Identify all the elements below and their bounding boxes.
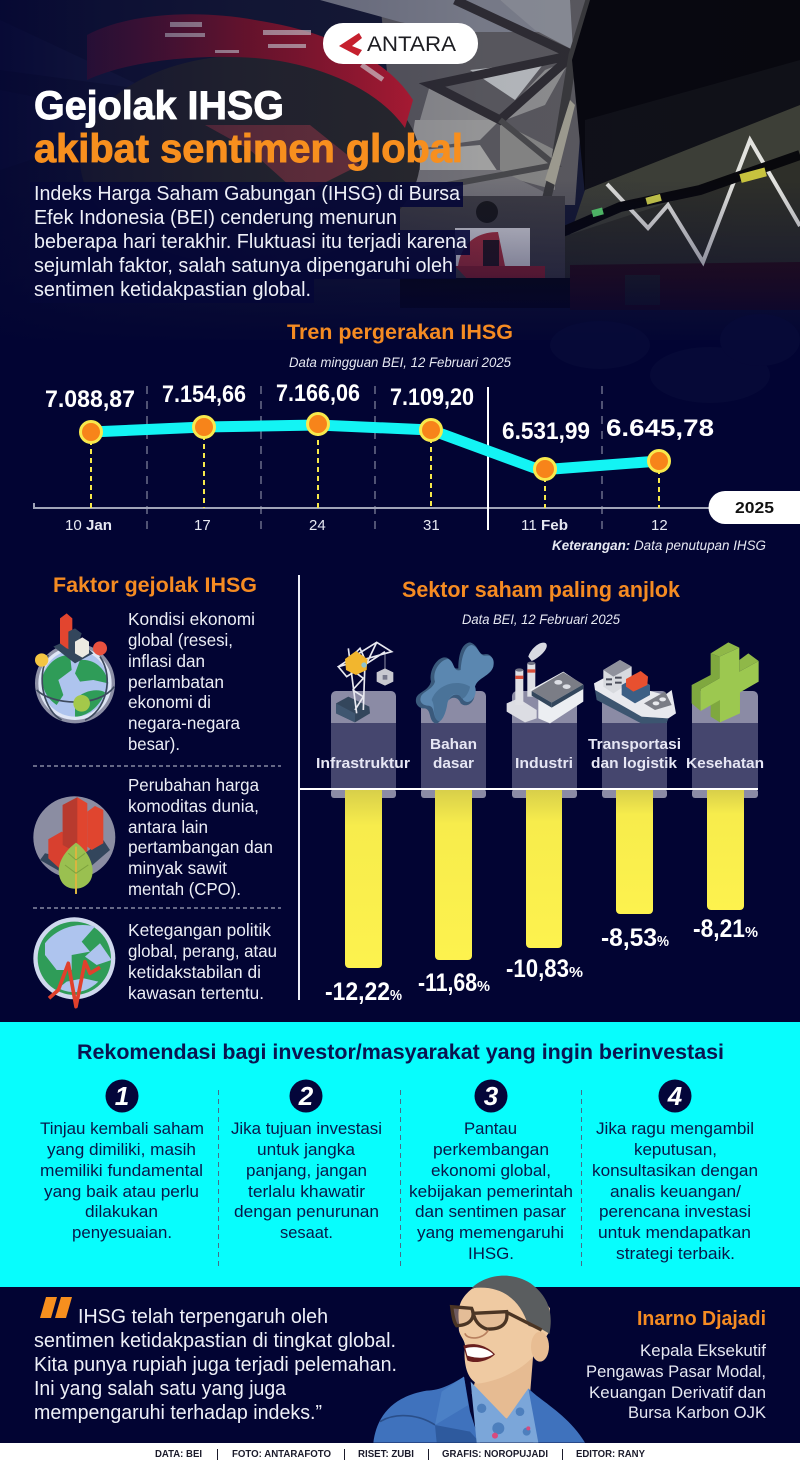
recommendation 1: penyesuaian.	[72, 1223, 172, 1242]
footer credits: EDITOR: RANY	[576, 1448, 645, 1460]
axis labels	[65, 517, 668, 534]
value labels: 7.088,87	[45, 386, 135, 413]
text: factor 1	[128, 609, 255, 754]
recommendation 3: Pantau	[464, 1119, 517, 1138]
text: factor 3: ketidakstabilan di	[128, 962, 261, 982]
recommendation 3: perkembangan	[433, 1140, 549, 1159]
recommendation 4	[592, 1119, 758, 1263]
recommendation 4: konsultasikan dengan	[592, 1161, 758, 1180]
footer credits: RISET: ZUBI	[358, 1448, 414, 1460]
sector values: -8,53	[601, 924, 657, 952]
stage	[400, 196, 565, 286]
ceiling	[380, 0, 590, 205]
sector labels: dasar	[433, 755, 474, 772]
data points	[80, 414, 670, 480]
recommendation 4: analis keuangan/	[610, 1182, 741, 1201]
panel: quote	[0, 1276, 800, 1443]
column backgrounds	[331, 691, 758, 798]
icon: factory	[507, 643, 583, 723]
icon: quotation mark	[40, 1297, 72, 1318]
sector values: -10,83	[506, 955, 569, 983]
bar chart: sector declines	[345, 790, 744, 968]
intro text block: sentimen ketidakpastian global.	[34, 279, 311, 301]
white chart zigzag	[607, 140, 800, 262]
faint seating	[550, 314, 800, 403]
icon: construction crane	[336, 642, 393, 722]
panel: volatility factors	[33, 574, 281, 1007]
axis labels: 10 Jan	[65, 517, 112, 534]
icon: commodity bars and leaf	[33, 796, 115, 894]
line chart: IHSG trend	[34, 380, 800, 553]
sector values: %	[657, 933, 669, 950]
text: factor 3: Ketegangan politik	[128, 920, 271, 940]
quote text: mempengaruhi terhadap indeks.”	[34, 1402, 322, 1424]
intro text block: beberapa hari terakhir. Fluktuasi itu terjadi karena	[34, 231, 468, 253]
axis labels: 31	[423, 517, 440, 534]
red ring display	[87, 14, 413, 128]
axis labels: 17	[194, 517, 211, 534]
heading: recommendations: Rekomendasi bagi investor/masyarakat yang ingin berinvestasi	[77, 1041, 724, 1064]
recommendation 1	[40, 1119, 204, 1242]
value labels: 6.531,99	[502, 418, 590, 445]
text: factor 1: negara-negara	[128, 713, 240, 733]
recommendation 3: IHSG.	[468, 1244, 514, 1263]
recommendation 3: yang memengaruhi	[417, 1223, 564, 1242]
axis labels: 11 Feb	[521, 517, 568, 534]
illustration: portrait of Inarno Djajadi	[373, 1276, 585, 1443]
heading: trend chart	[287, 321, 513, 370]
ticker	[553, 155, 800, 236]
person title: Kepala Eksekutif	[640, 1341, 766, 1360]
sector values: -12,22	[325, 978, 390, 1006]
number badges: 3	[484, 1081, 499, 1111]
sector labels: dan logistik	[591, 755, 678, 772]
recommendation 1: yang dimiliki, masih	[47, 1140, 196, 1159]
recommendation 4: perencana investasi	[599, 1202, 751, 1221]
panel: worst-performing sectors	[300, 577, 764, 1006]
logo: ANTARA pill	[323, 23, 478, 64]
icon: medical cross	[692, 642, 759, 722]
title	[34, 84, 463, 171]
icon: globe with bars	[35, 613, 115, 723]
logo: ANTARA pill: ANTARA	[367, 33, 456, 56]
text: factor 2: mentah (CPO).	[128, 879, 241, 899]
fades	[0, 0, 800, 560]
underside of ring	[80, 55, 420, 265]
sector values: %	[569, 964, 583, 981]
sector values	[325, 915, 758, 1006]
text: factor 2	[128, 775, 273, 899]
sector labels: Transportasi	[588, 736, 681, 753]
heading: trend chart: Data mingguan BEI, 12 Februari 2025	[289, 355, 511, 370]
panel: recommendations	[0, 1022, 800, 1287]
icon: cargo ship	[594, 660, 676, 724]
axis labels: 12	[651, 517, 668, 534]
text: factor 2: Perubahan harga	[128, 775, 259, 795]
person title: Pengawas Pasar Modal,	[586, 1362, 766, 1381]
sector labels: Infrastruktur	[316, 755, 410, 772]
recommendation 2: dengan penurunan	[234, 1202, 379, 1221]
recommendation 2: sesaat.	[280, 1223, 333, 1242]
intro text block	[30, 182, 470, 303]
text: factor 2: antara lain	[128, 817, 208, 837]
value labels: 6.645,78	[606, 415, 714, 442]
heading: trend chart: Tren pergerakan IHSG	[287, 321, 513, 344]
text: factor 1: ekonomi di	[128, 692, 211, 712]
recommendation 3	[409, 1119, 573, 1263]
number badges: 2	[298, 1081, 314, 1111]
recommendation 1: memiliki fundamental	[40, 1161, 203, 1180]
footer credits: DATA: BEI	[155, 1448, 202, 1460]
sector values: %	[745, 924, 758, 941]
value labels	[45, 380, 714, 445]
sector labels: Bahan	[430, 736, 477, 753]
footer credits	[0, 1443, 800, 1467]
person title: Keuangan Derivatif dan	[589, 1383, 766, 1402]
text: factor 1: inflasi dan	[128, 651, 205, 671]
quote text: sentimen ketidakpastian di tingkat global.	[34, 1330, 396, 1352]
sector labels: Kesehatan	[686, 755, 764, 772]
recommendation 1: Tinjau kembali saham	[40, 1119, 204, 1138]
intro text block: Efek Indonesia (BEI) cenderung menurun	[34, 207, 397, 229]
recommendation 2: Jika tujuan investasi	[231, 1119, 382, 1138]
recommendation 2: untuk jangka	[257, 1140, 356, 1159]
text: factor 3: kawasan tertentu.	[128, 983, 264, 1003]
intro text block: sejumlah faktor, salah satunya dipengaruhi oleh	[34, 255, 453, 277]
right dark panel	[572, 0, 800, 195]
sector values: -11,68	[418, 969, 477, 997]
person title: Bursa Karbon OJK	[628, 1403, 767, 1422]
subheading: sectors: Data BEI, 12 Februari 2025	[462, 612, 620, 627]
sector labels	[316, 736, 764, 772]
person title	[586, 1341, 767, 1422]
title: Gejolak IHSG	[34, 84, 284, 128]
text: factor 2: minyak sawit	[128, 858, 227, 878]
heading: factors: Faktor gejolak IHSG	[53, 574, 257, 597]
quote text: Ini yang salah satu yang juga	[34, 1378, 287, 1400]
panel divider	[298, 575, 300, 1000]
footer credits: GRAFIS: NOROPUJADI	[442, 1448, 548, 1460]
text: factor 3: global, perang, atau	[128, 941, 277, 961]
text: factor 1: perlambatan	[128, 672, 224, 692]
recommendation 4: untuk mendapatkan	[598, 1223, 751, 1242]
recommendation 1: yang baik atau perlu	[44, 1182, 199, 1201]
recommendation 1: dilakukan	[85, 1202, 158, 1221]
value labels: 7.166,06	[276, 380, 360, 407]
number badges: 1	[115, 1081, 129, 1111]
recommendation 2	[231, 1119, 382, 1242]
axis labels: 24	[309, 517, 326, 534]
text: factor 2: komoditas dunia,	[128, 796, 259, 816]
recommendation 4: Jika ragu mengambil	[596, 1119, 754, 1138]
value labels: 7.109,20	[390, 384, 474, 411]
number badges: 4	[667, 1081, 683, 1111]
text: factor 1: besar).	[128, 734, 180, 754]
icon: wrench puzzle (basic materials)	[416, 642, 494, 724]
value labels: 7.154,66	[162, 381, 246, 408]
quote text: Kita punya rupiah juga terjadi pelemahan.	[34, 1354, 397, 1376]
sector values: %	[390, 987, 402, 1004]
number badges	[106, 1080, 692, 1112]
text: factor 2: pertambangan dan	[128, 837, 273, 857]
icon: globe with red pulse	[33, 917, 115, 1007]
text: factor 3	[128, 920, 277, 1003]
recommendation 2: terlalu khawatir	[248, 1182, 365, 1201]
quote text: IHSG telah terpengaruh oleh	[78, 1306, 328, 1328]
quote text	[34, 1306, 397, 1424]
text: factor 1: global (resesi,	[128, 630, 233, 650]
title: akibat sentimen global	[34, 127, 463, 171]
header photo: stock exchange trading floor	[0, 0, 800, 560]
chart note: Keterangan: Data penutupan IHSG	[552, 538, 766, 553]
year pill	[709, 491, 800, 524]
recommendation 4: strategi terbaik.	[616, 1244, 735, 1263]
recommendation 3: dan sentimen pasar	[415, 1202, 566, 1221]
recommendation 3: kebijakan pemerintah	[409, 1182, 573, 1201]
year pill: 2025	[735, 500, 774, 517]
text: factor 1: Kondisi ekonomi	[128, 609, 255, 629]
person name: Inarno Djajadi	[637, 1308, 766, 1330]
footer credits: FOTO: ANTARAFOTO	[232, 1448, 331, 1460]
recommendation 3: ekonomi global,	[431, 1161, 551, 1180]
recommendation 4: keputusan,	[634, 1140, 717, 1159]
recommendation 2: panjang, jangan	[246, 1161, 367, 1180]
intro text block: Indeks Harga Saham Gabungan (IHSG) di Bursa	[34, 183, 461, 205]
sector labels: Industri	[515, 755, 573, 772]
sector values: -8,21	[693, 915, 745, 943]
sector values: %	[477, 978, 490, 995]
heading: sectors: Sektor saham paling anjlok	[402, 577, 681, 602]
